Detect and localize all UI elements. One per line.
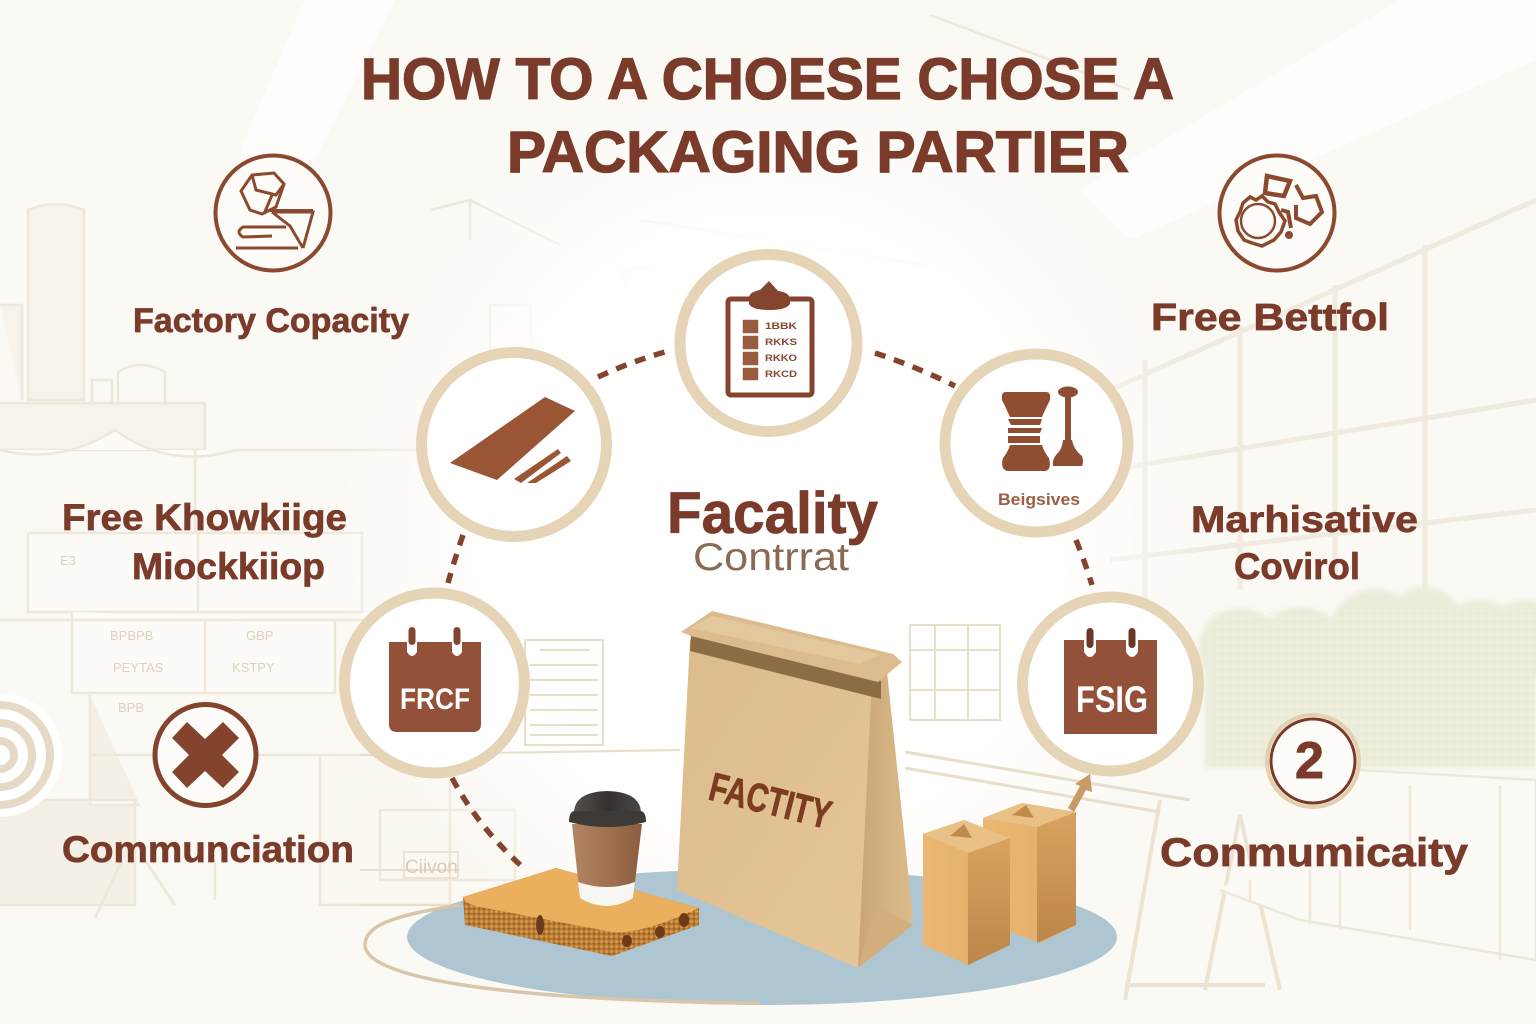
- icon: calendar: [1064, 627, 1157, 734]
- icon: calendar: FRCF: [400, 683, 470, 716]
- background: box scribble labels: BPB: [118, 700, 144, 715]
- circle: calendar FRCF: [344, 593, 524, 773]
- title: PACKAGING PARTIER: [507, 120, 1129, 185]
- icon: x mark: [155, 704, 256, 806]
- label: marhisative covirol: Covirol: [1234, 546, 1360, 587]
- panel: factory capacity: [133, 156, 409, 340]
- title: HOW TO A CHOESE CHOSE A: [361, 47, 1174, 112]
- icon: bullseye: [0, 693, 62, 817]
- icon: flat card: [450, 397, 575, 483]
- icon: factory capacity: [216, 156, 330, 270]
- platform: blue ellipse with ring: [365, 869, 1117, 1005]
- circle: materials: [945, 354, 1128, 532]
- label: Conmumicaity: [1160, 831, 1469, 875]
- centre heading: Facality: [667, 481, 878, 546]
- panel: free bettfol: [1151, 156, 1389, 339]
- label: marhisative covirol: [1191, 499, 1418, 587]
- product: coffee cup: [569, 791, 646, 906]
- background: box scribble labels: PEYTAS: [113, 660, 164, 675]
- label: Free Bettfol: [1151, 297, 1389, 339]
- icon: clipboard: RKCD: [765, 369, 798, 379]
- panel: conmumicaity: [1160, 715, 1469, 875]
- dashed connector arcs: [448, 352, 1092, 870]
- title: [361, 47, 1174, 185]
- background: trees: [1198, 587, 1536, 768]
- icon: number 2 badge: 2: [1295, 732, 1324, 790]
- label: marhisative covirol: Marhisative: [1191, 499, 1418, 540]
- product: small boxes: [923, 803, 1076, 965]
- label: free knowledge mockup: Miockkiiop: [132, 546, 325, 587]
- circle: flat card: [422, 352, 606, 536]
- icon: number 2 badge: [1267, 715, 1359, 807]
- label: Beigsives: [998, 490, 1080, 509]
- bag label: FACTITY: [705, 765, 836, 838]
- background: box scribble labels: E3: [60, 553, 76, 568]
- product: paper bag: [677, 611, 913, 968]
- arrow: lower right connector: [1068, 774, 1092, 812]
- icon: gears: [1220, 156, 1334, 270]
- background: faint shelving behind bag: [360, 625, 1190, 905]
- background: box scribble labels: [60, 553, 275, 715]
- panel: communication: [62, 704, 354, 870]
- label: free knowledge mockup: Free Khowkiige: [62, 497, 347, 538]
- icon: calendar: FSIG: [1076, 679, 1148, 720]
- icon: clipboard: 1BBK: [765, 321, 798, 331]
- icon: clipboard: RKKS: [765, 337, 797, 347]
- icon: clipboard: RKKO: [765, 353, 797, 363]
- label: Communciation: [62, 829, 354, 870]
- label: free knowledge mockup: [62, 497, 347, 587]
- background: box scribble labels: KSTPY: [232, 660, 275, 675]
- icon: clipboard: [728, 281, 812, 395]
- background: box scribble labels: BPBPB: [110, 628, 153, 643]
- centre heading: [667, 481, 878, 579]
- desk and counter: [1125, 800, 1280, 1000]
- label: Factory Copacity: [133, 302, 409, 340]
- icon: calendar: [389, 627, 481, 732]
- icon: vase and plunger: [1002, 386, 1083, 471]
- right windows: [1110, 200, 1536, 620]
- left shelving: [0, 204, 205, 450]
- circle: calendar FSIG: [1022, 597, 1198, 771]
- background: faint shelving behind bag: Ciivon: [405, 857, 458, 878]
- background: box scribble labels: GBP: [246, 628, 273, 643]
- circle: clipboard: [680, 254, 857, 432]
- product: woven tray: [463, 868, 699, 956]
- centre glow: [330, 60, 1210, 1000]
- centre heading: Contrrat: [693, 536, 849, 579]
